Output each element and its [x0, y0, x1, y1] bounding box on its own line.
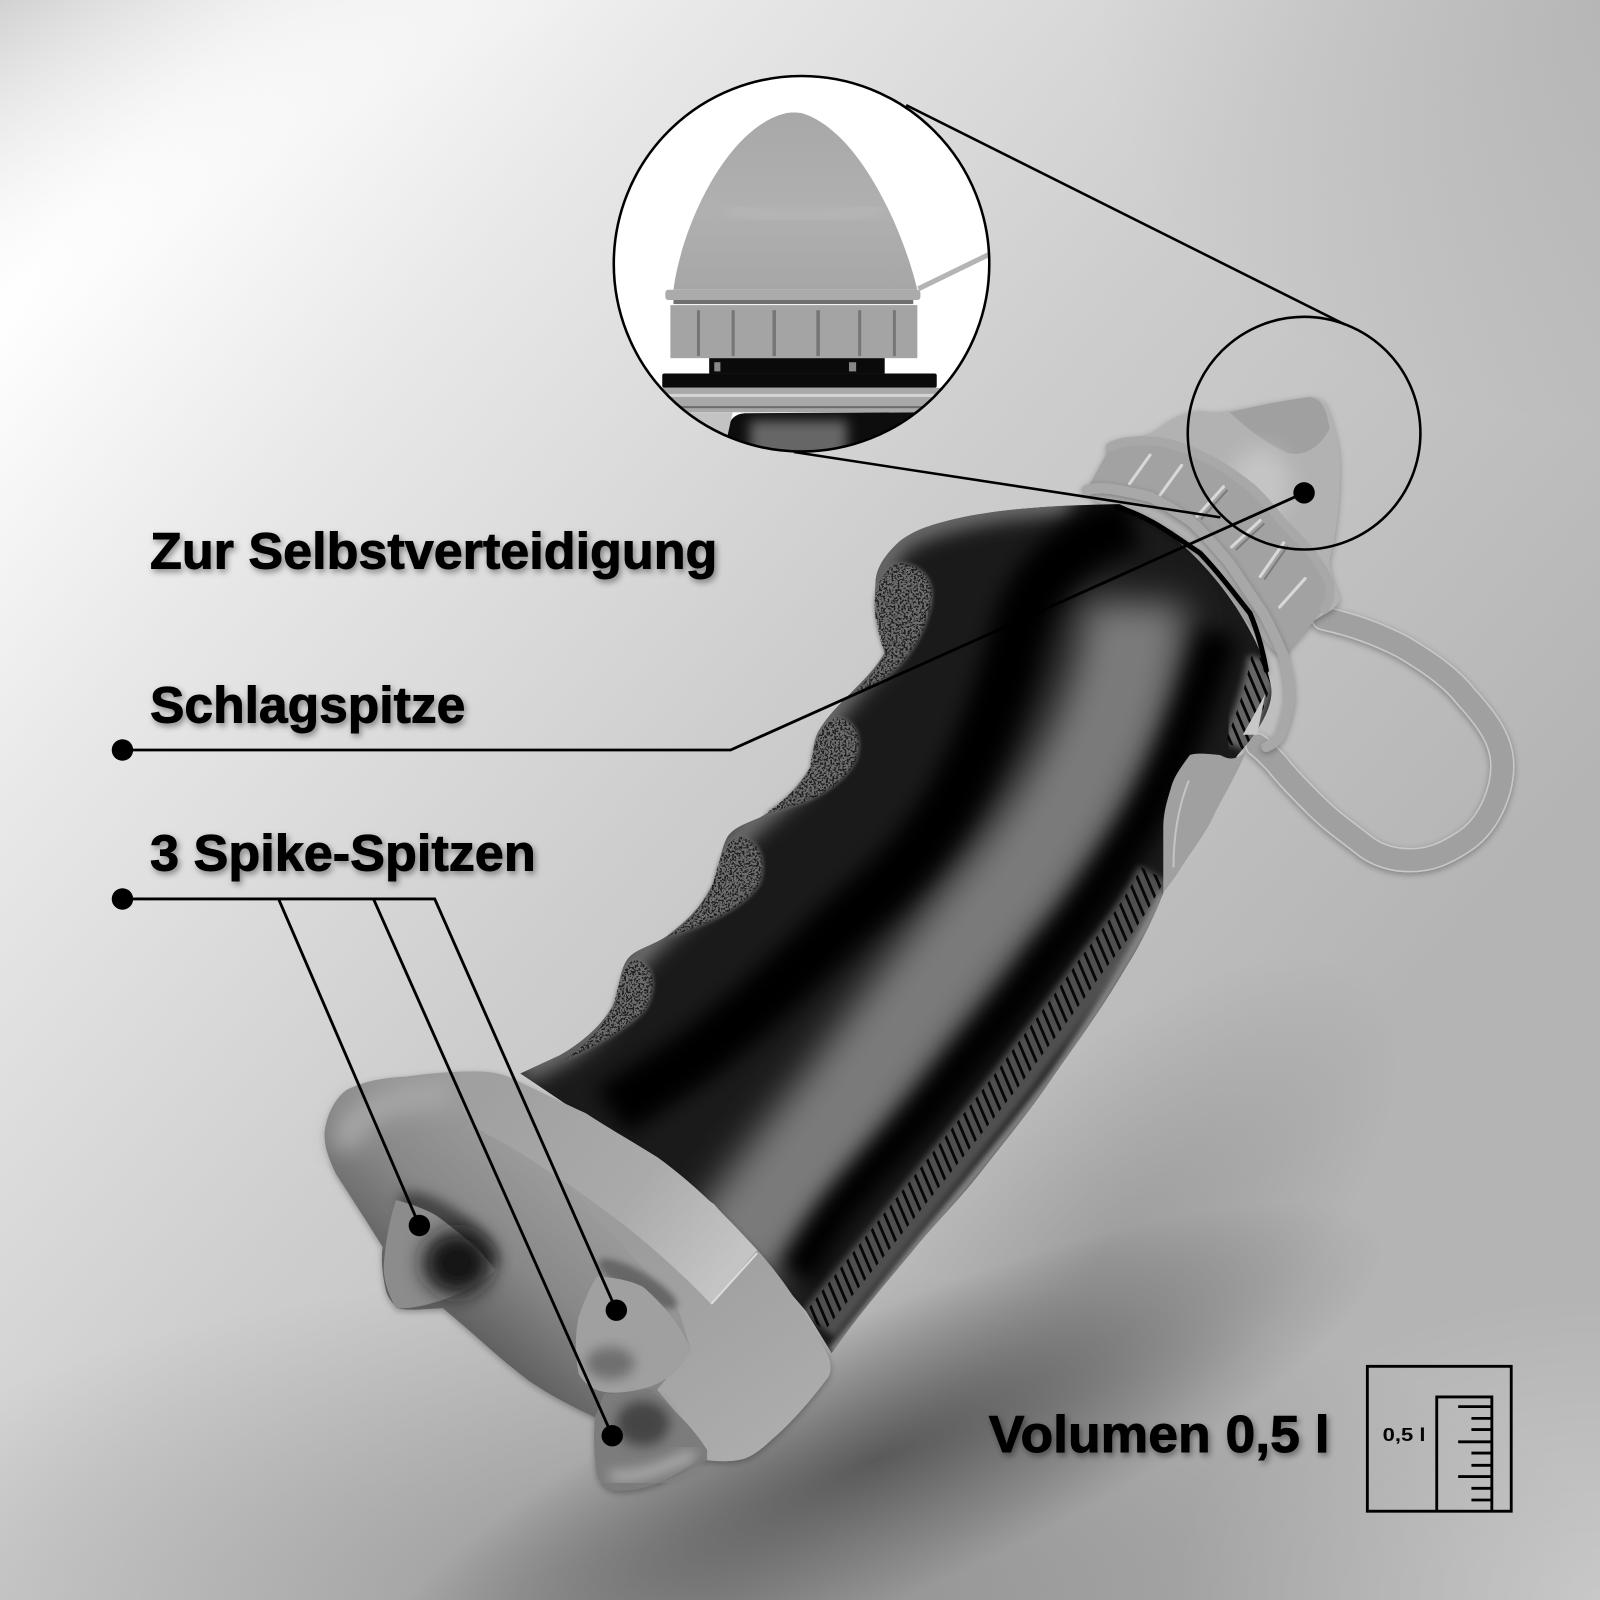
- black band: [612, 522, 1133, 1112]
- base cap with three spikes: [324, 1071, 831, 1491]
- product: grip bottle: [324, 397, 1502, 1491]
- spike middle: [576, 1251, 691, 1393]
- spike bottom: [594, 1390, 707, 1491]
- silver top strip: [459, 1071, 757, 1304]
- thumb rest: [1163, 750, 1247, 893]
- right dark band: [797, 633, 1219, 1277]
- outer rim: [567, 1157, 831, 1461]
- label: Schlagspitze: Schlagspitze: [150, 676, 465, 733]
- textured grip pads: [560, 563, 932, 1062]
- callout line: Schlagspitze: [112, 482, 1315, 761]
- heading: Zur Selbstverteidigung: Zur Selbstverteidigung: [150, 522, 717, 579]
- ridged grip strip: [818, 876, 1157, 1324]
- dark inset: [726, 412, 914, 450]
- magnifier connector lines and small circle: [794, 105, 1420, 549]
- collar ridges: [1087, 439, 1330, 656]
- black lip: [662, 373, 937, 388]
- black neck: [709, 358, 885, 373]
- carrying loop: [1257, 618, 1502, 860]
- screw cap with nose: [1087, 397, 1340, 656]
- lower neck ring: [1087, 488, 1290, 747]
- icon value: 0,5 l: [1383, 1424, 1426, 1445]
- flange: [665, 290, 920, 300]
- grip edge highlight: [520, 502, 1071, 1071]
- upper ring: [1110, 441, 1330, 609]
- label: Volumen: Volumen 0,5 l: [989, 1406, 1330, 1464]
- cap back surface: [324, 1071, 831, 1491]
- grey centre band: [724, 602, 1135, 1265]
- lanyard: [918, 253, 992, 289]
- spike left: [384, 1179, 509, 1308]
- cap nose: [1092, 397, 1340, 653]
- body: [520, 502, 1271, 1353]
- enlarged nose: [673, 112, 917, 290]
- callout lines: spikes: [112, 888, 627, 1446]
- ribbed ring: [670, 305, 917, 358]
- magnified cap detail: [614, 76, 992, 461]
- icon: volume gauge: [1367, 1366, 1511, 1511]
- label: 3 Spike-Spitzen: 3 Spike-Spitzen: [150, 824, 536, 881]
- grey lower band: [653, 388, 949, 412]
